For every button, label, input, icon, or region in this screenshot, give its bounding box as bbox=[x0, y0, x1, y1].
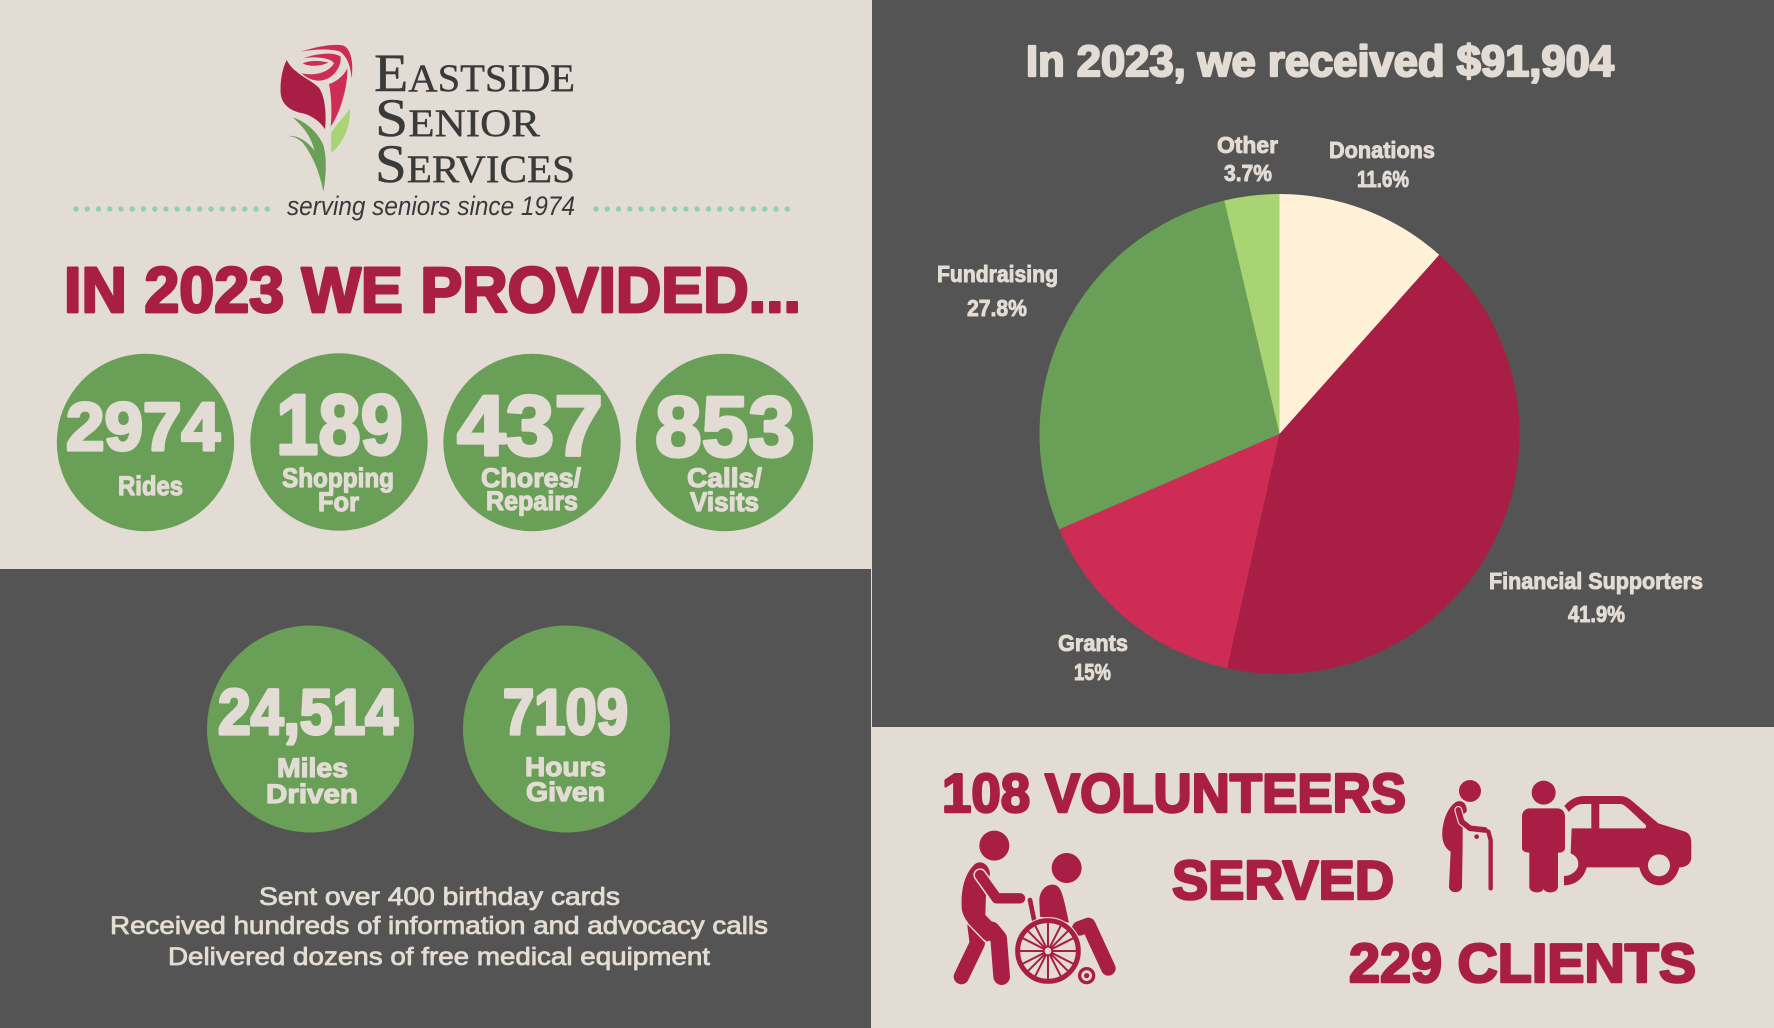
stat: 853 calls/visits bbox=[636, 354, 813, 531]
stat: 2974 rides: 2974 bbox=[66, 389, 220, 465]
pie label: fundraising bbox=[937, 261, 1058, 321]
pie label: donations bbox=[1329, 137, 1435, 192]
icon: rose bbox=[281, 45, 352, 192]
icon: person pushing wheelchair bbox=[961, 831, 1108, 985]
pie label: other bbox=[1217, 132, 1278, 186]
tagline: serving seniors since 1974 bbox=[287, 191, 575, 221]
pie label: other: 3.7% bbox=[1224, 160, 1272, 186]
pie label: financial supporters bbox=[1489, 568, 1703, 627]
slice: other bbox=[1224, 194, 1280, 434]
logo wordmark: SERVICES bbox=[375, 134, 575, 194]
stat: 437 chores/repairs: Repairs bbox=[486, 486, 578, 516]
stat: 7109 hours given: Hours bbox=[525, 752, 606, 782]
pie label: fundraising: Fundraising bbox=[937, 261, 1058, 287]
pie label: fundraising: 27.8% bbox=[967, 295, 1027, 321]
heading: served: SERVED bbox=[1172, 849, 1394, 911]
slice: grants bbox=[1059, 434, 1280, 668]
panel: miles and hours bbox=[0, 569, 871, 1028]
stat: 189 shopping for bbox=[250, 353, 428, 531]
panel: income pie chart background bbox=[872, 0, 1774, 727]
stat: 853 calls/visits: Visits bbox=[690, 487, 759, 517]
pie label: donations: 11.6% bbox=[1357, 166, 1409, 192]
stat: 24,514 miles driven: 24,514 bbox=[218, 676, 398, 748]
stat: 24,514 miles driven: Miles bbox=[277, 753, 348, 783]
pie label: financial supporters: Financial Supporters bbox=[1489, 568, 1703, 594]
stat: 189 shopping for: For bbox=[318, 487, 359, 517]
stat: 853 calls/visits: 853 bbox=[655, 380, 795, 475]
icon: elderly person with cane, helper and car bbox=[1442, 780, 1691, 892]
pie label: grants: 15% bbox=[1074, 659, 1111, 685]
text block: other accomplishments bbox=[110, 883, 768, 971]
stat: 437 chores/repairs: Chores/ bbox=[481, 463, 581, 493]
panel: volunteers and clients background bbox=[871, 727, 1774, 1028]
slice: fundraising bbox=[1039, 200, 1280, 529]
pie label: donations: Donations bbox=[1329, 137, 1435, 163]
stat: 24,514 miles driven bbox=[207, 626, 414, 832]
logo wordmark bbox=[374, 43, 575, 194]
stat: 7109 hours given bbox=[463, 626, 670, 832]
heading: 108 volunteers: 108 VOLUNTEERS bbox=[942, 762, 1406, 824]
text block: other accomplishments: Received hundreds of information and advocacy calls bbox=[110, 912, 768, 940]
slice: donations bbox=[1280, 194, 1439, 434]
stat: 189 shopping for: 189 bbox=[276, 378, 403, 473]
stat: 7109 hours given: 7109 bbox=[503, 676, 628, 748]
heading: in 2023 we provided: IN 2023 WE PROVIDED... bbox=[64, 254, 801, 326]
stat: 2974 rides: Rides bbox=[118, 471, 183, 501]
stat: 853 calls/visits: Calls/ bbox=[687, 463, 763, 493]
logo wordmark: SENIOR bbox=[375, 88, 540, 148]
pie chart: income sources bbox=[1039, 194, 1520, 674]
heading: in 2023 we received: In 2023, we received $91,904 bbox=[1026, 37, 1615, 86]
stat: 437 chores/repairs: 437 bbox=[457, 379, 603, 474]
panel: logo and services provided bbox=[0, 0, 872, 569]
logo wordmark: EASTSIDE bbox=[374, 43, 575, 103]
stat: 24,514 miles driven: Driven bbox=[266, 779, 358, 809]
stat: 7109 hours given: Given bbox=[526, 777, 605, 807]
pie label: grants: Grants bbox=[1058, 630, 1128, 656]
heading: 229 clients: 229 CLIENTS bbox=[1349, 932, 1696, 994]
pie label: grants bbox=[1058, 630, 1128, 685]
text block: other accomplishments: Delivered dozens of free medical equipment bbox=[168, 943, 710, 971]
pie label: financial supporters: 41.9% bbox=[1568, 601, 1625, 627]
stat: 437 chores/repairs bbox=[443, 354, 621, 531]
slice: financial supporters bbox=[1227, 255, 1520, 674]
stat: 189 shopping for: Shopping bbox=[282, 463, 394, 493]
logo: Eastside Senior Services bbox=[281, 43, 575, 221]
text block: other accomplishments: Sent over 400 birthday cards bbox=[259, 883, 620, 911]
stat: 2974 rides bbox=[57, 354, 234, 531]
pie label: other: Other bbox=[1217, 132, 1278, 158]
